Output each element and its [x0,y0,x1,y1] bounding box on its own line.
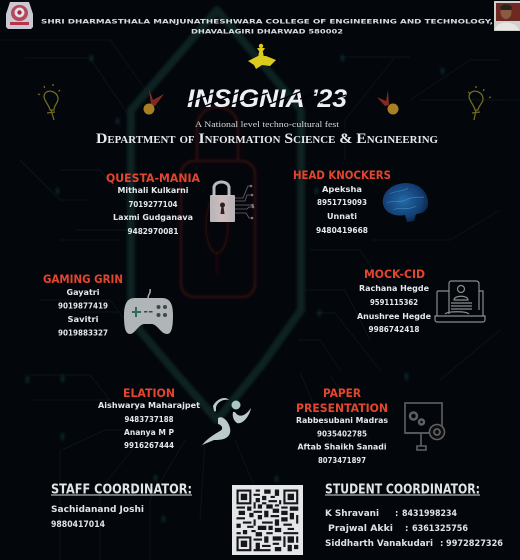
panel: Head Knockers: Unnati [327,212,357,221]
student coordinator: K Shravani [325,509,379,519]
panel: Mock-CID [357,267,432,334]
panel: Elation [98,386,200,450]
student coordinator: 9972827326 [446,539,503,549]
panel: Gaming Grin: Savitri [68,315,99,324]
panel: Elation: Ananya M P [124,428,174,437]
panel: Questa-Mania: QUESTA-MANIA [106,171,200,185]
icon: medal right [377,90,398,114]
panel: Questa-Mania: Laxmi Gudganava [113,213,193,222]
panel: Mock-CID: Anushree Hegde [357,312,432,321]
panel: Questa-Mania [106,171,200,236]
panel: Elation: ELATION [123,386,175,400]
icon: monitor with gears [405,403,444,450]
title: INSIGNIA '23 [187,85,347,113]
student coordinator: Siddharth Vanakudari [325,539,433,549]
icon: golden lamp [248,44,276,69]
student coordinator: 6361325756 [412,524,468,534]
panel: Paper Presentation: PRESENTATION [296,401,388,415]
college logo [6,2,33,29]
icon: game controller [124,289,173,334]
panel: Elation: 9916267444 [124,441,174,450]
subtitle: A National level techno-cultural fest [195,119,340,129]
panel: Head Knockers: 9480419668 [316,226,368,235]
panel: Head Knockers: Apeksha [322,185,362,194]
icon: profile on laptop [435,281,485,322]
panel: Questa-Mania: 7019277104 [128,200,178,209]
college name: DHAVALAGIRI DHARWAD 580002 [191,28,343,36]
student coordinator: : [440,539,443,549]
panel: Paper Presentation: 9035402785 [317,430,367,438]
student coordinator: : [395,509,398,519]
staff coordinator: STAFF COORDINATOR: [51,482,192,498]
staff coordinator [51,482,192,530]
panel: Elation: Aishwarya Maharajpet [98,401,200,410]
student coordinator [325,482,503,549]
panel: Questa-Mania: 9482970081 [128,227,179,236]
icon: medal left [144,89,164,114]
panel: Mock-CID: 9986742418 [368,325,420,334]
panel: Gaming Grin: Gayatri [66,288,100,297]
panel: Gaming Grin: 9019883327 [58,328,108,338]
icon: bulb left [38,84,60,120]
icon: bulb right [468,86,491,120]
panel: Head Knockers: 8951719093 [317,198,367,207]
panel: Paper Presentation: Aftab Shaikh Sanadi [298,442,387,452]
panel: Gaming Grin: 9019877419 [58,302,108,310]
background: red padlock outline [181,107,255,297]
college name: SHRI DHARMASTHALA MANJUNATHESHWARA COLLEGE OF ENGINEERING AND TECHNOLOGY, [41,18,493,26]
background: teal padlock outline [131,10,301,420]
panel: Gaming Grin: GAMING GRIN [43,272,123,286]
student coordinator: : [405,524,408,534]
panel: Gaming Grin [43,272,123,338]
panel: Head Knockers [293,168,391,235]
staff coordinator: 9880417014 [51,520,105,530]
department heading: Department of Information Science & Engineering [96,131,438,147]
panel: Head Knockers: HEAD KNOCKERS [293,168,391,182]
student coordinator: Prajwal Akki [328,524,393,534]
panel: Paper Presentation: PAPER [323,386,361,400]
panel: Paper Presentation [296,386,388,465]
icon: padlock [210,182,254,222]
panel: Elation: 9483737188 [124,415,174,424]
icon: runner [202,398,251,445]
icon: brain [383,183,428,222]
portrait photo [494,1,520,31]
panel: Mock-CID: MOCK-CID [364,267,425,281]
background nodes [26,55,444,522]
staff coordinator: Sachidanand Joshi [51,505,144,515]
student coordinator: STUDENT COORDINATOR: [325,482,480,498]
student coordinator: 8431998234 [402,509,457,519]
panel: Paper Presentation: Rabbesubani Madras [296,416,388,425]
panel: Questa-Mania: Mithali Kulkarni [118,186,189,195]
panel: Mock-CID: Rachana Hegde [359,284,430,293]
QR code [232,485,303,555]
panel: Mock-CID: 9591115362 [370,298,418,307]
panel: Paper Presentation: 8073471897 [318,456,366,465]
college name [41,18,493,36]
